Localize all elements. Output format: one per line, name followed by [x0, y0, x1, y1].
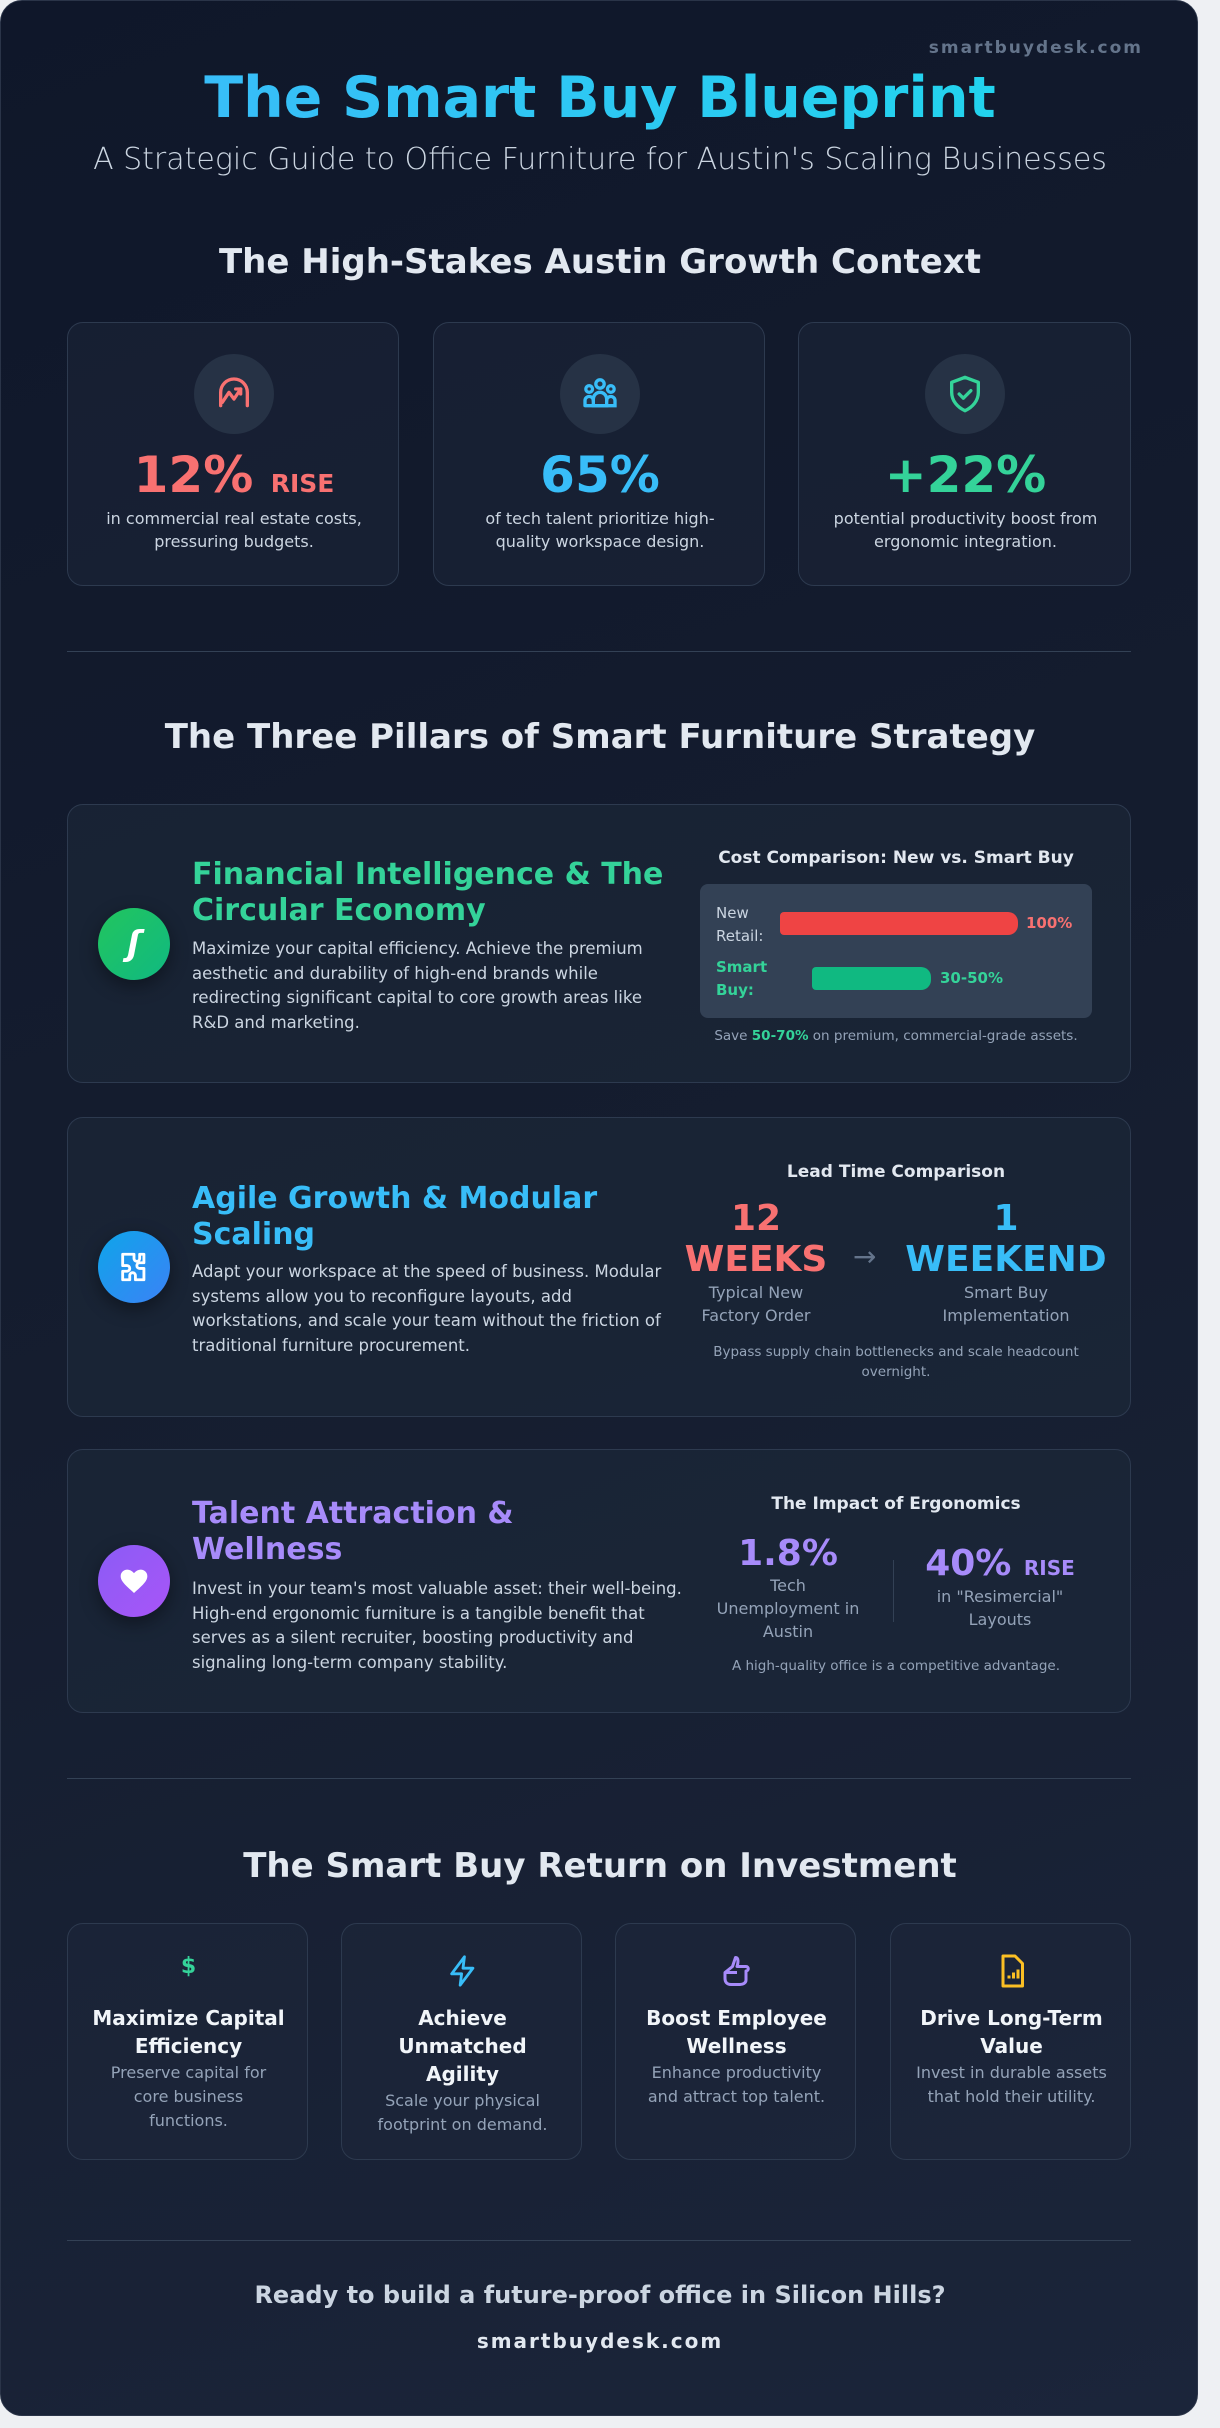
chart: impact of ergonomics: 40% RISE — [925, 1543, 1075, 1584]
chart: impact of ergonomics: A high-quality office is a competitive advantage. — [732, 1658, 1060, 1674]
pillar 3 panel — [67, 1449, 1131, 1713]
pillar 3 title — [192, 1496, 514, 1567]
chart: lead time comparison: Bypass supply chain bottlenecks and scale headcount overnight. — [713, 1344, 1079, 1380]
chart: impact of ergonomics: Tech — [770, 1576, 806, 1595]
ROI card 3: Enhance productivity and attract top talent. — [648, 2063, 825, 2106]
stat card 3: potential productivity boost from ergonomic integration. — [834, 509, 1097, 551]
footer site: smartbuydesk.com — [477, 2329, 723, 2353]
pillar 3 title: Talent Attraction & — [192, 1496, 514, 1531]
title: The Smart Buy Blueprint — [204, 65, 996, 131]
chart: impact of ergonomics: 1.8% — [738, 1533, 838, 1574]
ROI card 2: Unmatched — [398, 2034, 527, 2058]
stat card 3 — [798, 322, 1131, 586]
chart: impact of ergonomics: in "Resimercial" — [937, 1587, 1063, 1606]
pillar 2 panel — [67, 1117, 1131, 1417]
chart: impact of ergonomics: Unemployment in — [717, 1599, 859, 1618]
chart: lead time comparison: 12 — [731, 1198, 781, 1239]
ROI card 4: Drive Long-Term — [920, 2006, 1103, 2030]
chart: cost comparison: Buy: — [716, 981, 754, 999]
chart: cost comparison: Cost Comparison: New vs. Smart Buy — [718, 848, 1074, 868]
chart: lead time comparison: 1 — [993, 1198, 1019, 1239]
chart: lead time comparison: → — [853, 1240, 876, 1273]
pillar 1 title — [192, 857, 663, 928]
ROI card 1 — [67, 1923, 308, 2160]
chart: lead time comparison: Smart Buy — [964, 1283, 1048, 1302]
pillar 1 icon: ʃ — [127, 924, 141, 964]
pillar 3 title: Wellness — [192, 1532, 342, 1567]
ROI card 1: Preserve capital for core business functions. — [111, 2063, 266, 2130]
heading: three pillars: The Three Pillars of Smart Furniture Strategy — [165, 717, 1035, 757]
pillar 2 body: Adapt your workspace at the speed of business. Modular systems allow you to reconfigure layouts, add workstations, and scale your team without the friction of traditional furniture procurement. — [192, 1262, 661, 1354]
icon: hand — [724, 1956, 750, 1986]
pillar 1 icon — [98, 908, 170, 980]
icon: shield — [925, 354, 1005, 434]
chart: impact of ergonomics: The Impact of Ergonomics — [771, 1494, 1021, 1514]
pillar 3 icon — [98, 1545, 170, 1617]
chart: cost comparison: 100% — [1026, 914, 1072, 932]
ROI card 3 — [615, 1923, 856, 2160]
ROI card 3: Wellness — [686, 2034, 787, 2058]
pillar 2 icon — [98, 1231, 170, 1303]
chart: impact of ergonomics: Layouts — [969, 1610, 1031, 1629]
stat card 2: of tech talent prioritize high-quality workspace design. — [485, 509, 715, 551]
heading: ROI: The Smart Buy Return on Investment — [243, 1846, 957, 1886]
ROI card 3: Boost Employee — [646, 2006, 827, 2030]
icon: bolt — [450, 1955, 474, 1987]
ROI card 2: Agility — [426, 2062, 499, 2086]
stat 12%: 12% RISE — [134, 446, 334, 504]
chart: lead time comparison: Typical New — [709, 1283, 803, 1302]
pillar 1 title: Financial Intelligence & The — [192, 857, 663, 892]
pillar 1 title: Circular Economy — [192, 893, 486, 928]
pillar 2 title: Scaling — [192, 1217, 315, 1252]
ROI card 4: Invest in durable assets that hold their utility. — [916, 2063, 1107, 2106]
pillar 2 title: Agile Growth & Modular — [192, 1181, 597, 1216]
ROI card 1: Efficiency — [135, 2034, 242, 2058]
ROI card 4 — [890, 1923, 1131, 2160]
CTA text: Ready to build a future-proof office in Silicon Hills? — [254, 2281, 946, 2309]
chart: cost comparison: Save 50-70% on premium, commercial-grade assets. — [714, 1028, 1078, 1044]
chart: cost comparison: New — [716, 904, 749, 922]
pillar 1 body: Maximize your capital efficiency. Achieve the premium aesthetic and durability of high-end brands while redirecting significant capital to core growth areas like R&D and marketing. — [192, 939, 643, 1032]
chart: cost comparison: 30-50% — [940, 969, 1003, 987]
chart: lead time comparison — [685, 1162, 1107, 1380]
chart: cost comparison — [700, 848, 1092, 1044]
ROI card 2 — [341, 1923, 582, 2160]
chart: impact of ergonomics: Austin — [763, 1622, 813, 1641]
chart: lead time comparison: Lead Time Comparison — [787, 1162, 1005, 1182]
ROI card 2: Scale your physical footprint on demand. — [378, 2091, 547, 2134]
icon: dollar: $ — [181, 1954, 196, 1979]
site label top: smartbuydesk.com — [929, 38, 1143, 58]
pillar 3 body: Invest in your team's most valuable asset: their well-being. High-end ergonomic furniture is a tangible benefit that serves as a silent recruiter, boosting productivity and signaling long-term company stability. — [192, 1579, 682, 1672]
icon: people — [560, 354, 640, 434]
stat card 2 — [433, 322, 765, 586]
chart: lead time comparison: WEEKS — [685, 1239, 827, 1280]
chart: impact of ergonomics — [717, 1494, 1075, 1674]
chart: lead time comparison: Factory Order — [702, 1306, 810, 1325]
chart: lead time comparison: WEEKEND — [905, 1239, 1107, 1280]
stat card 1 — [67, 322, 399, 586]
ROI card 2: Achieve — [418, 2006, 507, 2030]
subtitle: A Strategic Guide to Office Furniture for Austin's Scaling Businesses — [93, 142, 1107, 177]
stat 65%: 65% — [540, 446, 660, 504]
icon: report — [1002, 1954, 1024, 1988]
heading: growth context: The High-Stakes Austin Growth Context — [219, 242, 981, 282]
chart: cost comparison: Smart — [716, 958, 767, 976]
icon: trend — [194, 354, 274, 434]
stat card 1: in commercial real estate costs, pressuring budgets. — [106, 509, 362, 551]
pillar 1 panel — [67, 804, 1131, 1083]
pillar 2 title — [192, 1181, 598, 1252]
ROI card 1: Maximize Capital — [92, 2006, 285, 2030]
chart: lead time comparison: Implementation — [942, 1306, 1070, 1325]
chart: cost comparison: Retail: — [716, 927, 763, 945]
stat +22%: +22% — [885, 446, 1046, 504]
ROI card 4: Value — [980, 2034, 1043, 2058]
